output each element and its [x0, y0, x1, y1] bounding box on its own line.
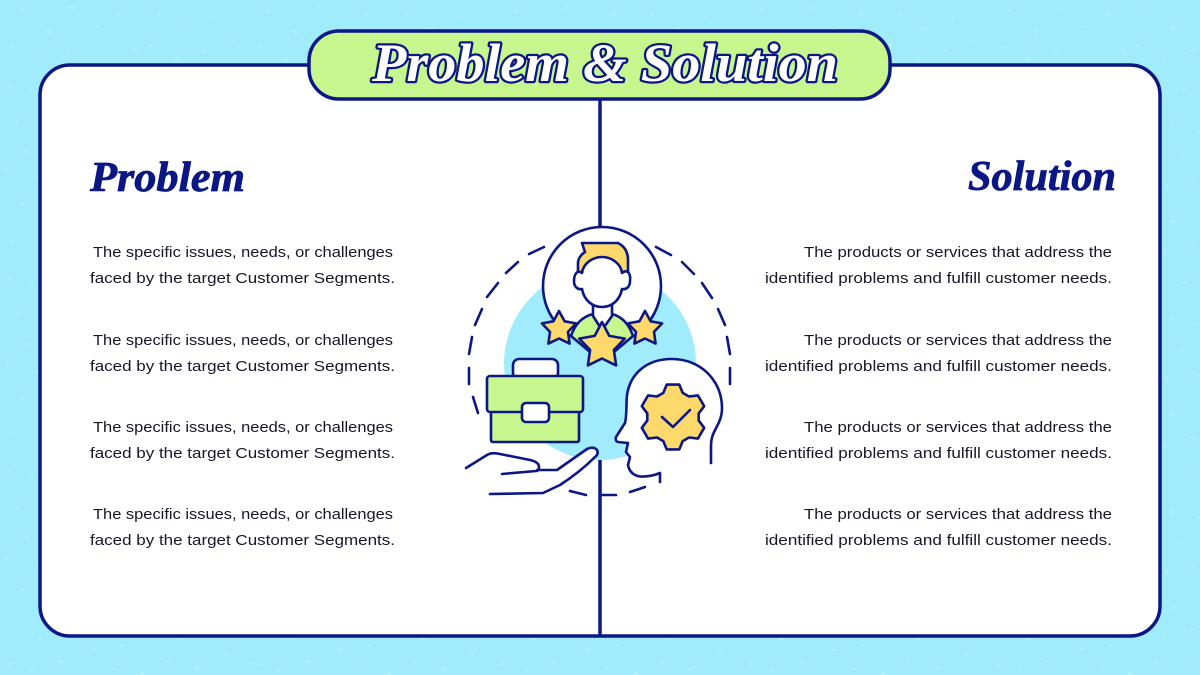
neck	[593, 303, 612, 330]
solution item 3: identified problems and fulfill customer needs.	[765, 445, 1112, 462]
rating stars	[542, 311, 662, 365]
problem item 1	[90, 244, 395, 287]
title text: Problem & Solution	[371, 33, 838, 93]
problem item 1: faced by the target Customer Segments.	[90, 270, 395, 287]
solution item 1: identified problems and fulfill customer needs.	[765, 270, 1112, 287]
gear icon	[642, 385, 704, 449]
solution item 4	[765, 506, 1112, 549]
title banner	[309, 31, 890, 99]
face	[574, 257, 630, 307]
problem item 1: The specific issues, needs, or challenges	[93, 244, 393, 261]
solution item 3: The products or services that address the	[804, 419, 1112, 436]
dashed orbit ring	[469, 247, 730, 495]
blue circle backdrop	[504, 268, 696, 460]
solution item 2	[765, 332, 1112, 375]
solution text blocks	[765, 244, 1112, 549]
head profile with gear	[616, 359, 722, 482]
problem item 3: The specific issues, needs, or challenges	[93, 419, 393, 436]
problem item 3	[90, 419, 395, 462]
briefcase	[487, 359, 583, 442]
problem item 4	[90, 506, 395, 549]
solution heading: Solution	[968, 154, 1116, 200]
main white card	[40, 65, 1160, 636]
hair	[578, 243, 628, 275]
problem heading: Problem	[89, 155, 245, 201]
person portrait	[543, 227, 661, 352]
solution item 2: identified problems and fulfill customer needs.	[765, 358, 1112, 375]
solution item 2: The products or services that address the	[804, 332, 1112, 349]
problem item 4: faced by the target Customer Segments.	[90, 532, 395, 549]
shoulders	[571, 314, 633, 352]
problem item 4: The specific issues, needs, or challenges	[93, 506, 393, 523]
centre divider line	[598, 98, 602, 636]
problem text blocks	[90, 244, 395, 549]
solution item 4: The products or services that address the	[804, 506, 1112, 523]
solution item 4: identified problems and fulfill customer needs.	[765, 532, 1112, 549]
check mark	[662, 410, 690, 427]
problem item 2: faced by the target Customer Segments.	[90, 358, 395, 375]
solution item 1	[765, 244, 1112, 287]
open hand	[466, 448, 598, 494]
central illustration	[466, 227, 730, 495]
problem item 2	[90, 332, 395, 375]
solution item 3	[765, 419, 1112, 462]
solution item 1: The products or services that address the	[804, 244, 1112, 261]
problem item 2: The specific issues, needs, or challenges	[93, 332, 393, 349]
problem item 3: faced by the target Customer Segments.	[90, 445, 395, 462]
